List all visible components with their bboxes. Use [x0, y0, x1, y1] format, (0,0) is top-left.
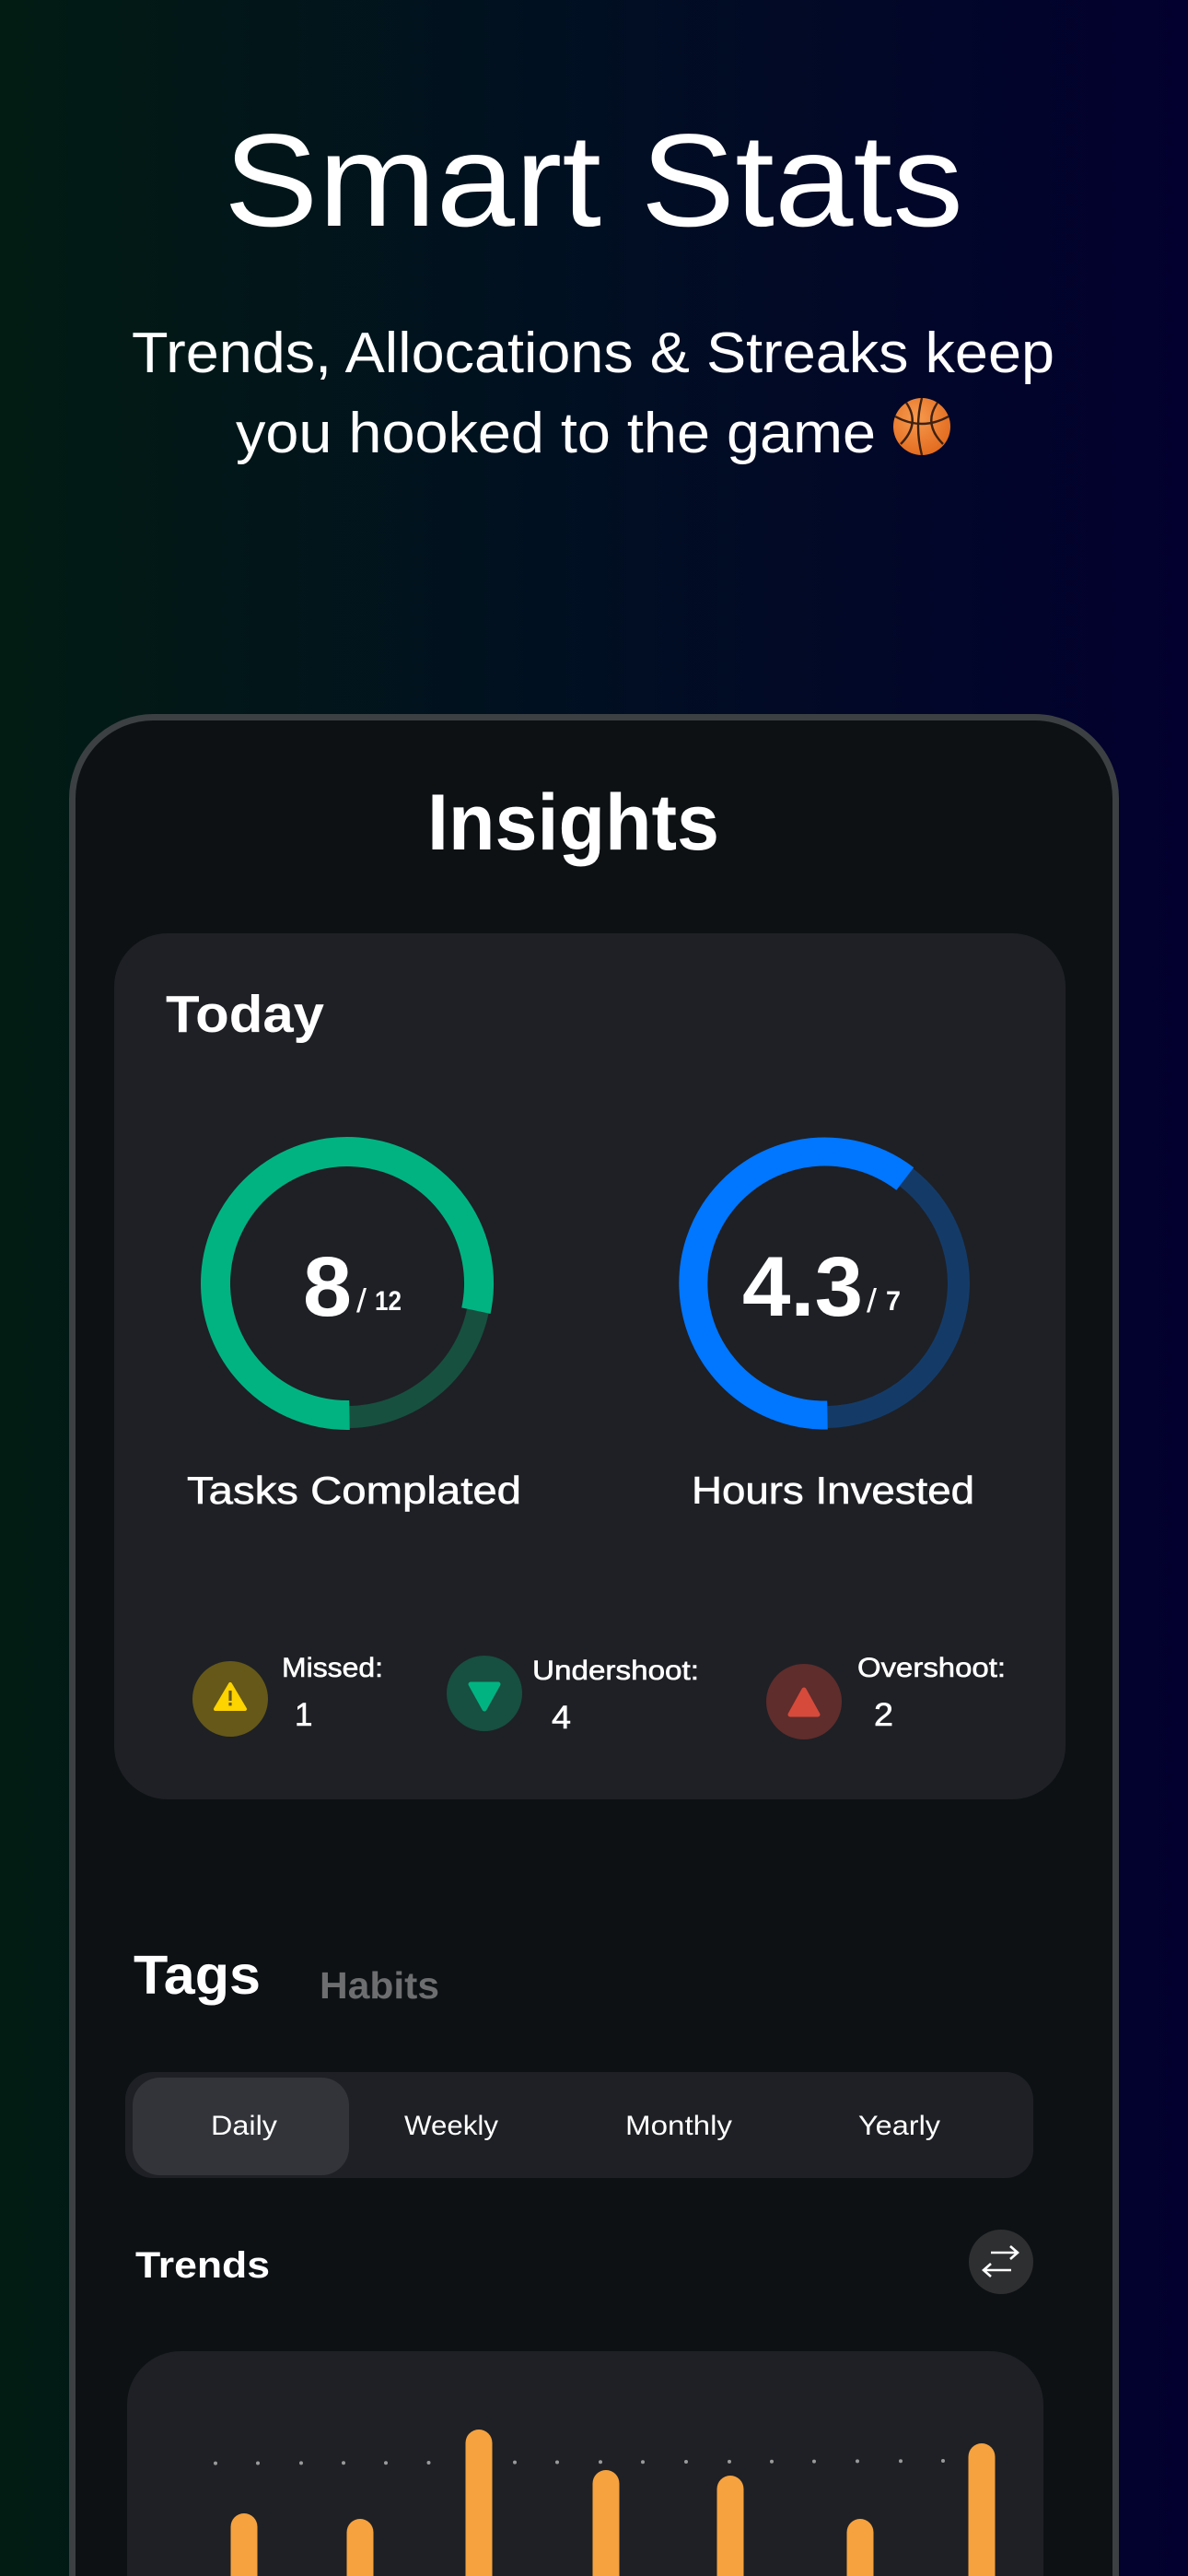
hours value: 7	[886, 1286, 901, 1317]
tasks value: 8	[303, 1240, 352, 1334]
selector track	[125, 2072, 1033, 2178]
donut chart: hours invested	[693, 1152, 959, 1417]
period selector	[125, 2072, 1033, 2178]
today card background	[114, 933, 1066, 1799]
tasks value: 12	[375, 1286, 402, 1317]
subtitle: Trends, Allocations & Streaks keep	[132, 322, 1054, 385]
panel: trends chart	[127, 2351, 1043, 2576]
chart card	[127, 2351, 1043, 2576]
bars	[230, 2430, 995, 2576]
today heading: Today	[166, 985, 324, 1044]
missed value: 1	[295, 1697, 312, 1733]
phone frame	[72, 717, 1116, 2576]
phone mockup	[72, 717, 1116, 2576]
title: Smart Stats	[224, 108, 963, 254]
selector labels	[211, 2111, 940, 2141]
subtitle	[132, 322, 1054, 465]
target dotted line	[214, 2459, 945, 2465]
undershoot label: Undershoot:	[532, 1656, 699, 1686]
selector labels: Yearly	[858, 2111, 940, 2141]
selector labels: Daily	[211, 2111, 277, 2141]
hours label: Hours Invested	[692, 1469, 974, 1512]
missed label: Missed:	[282, 1653, 383, 1683]
icon: swap button	[969, 2230, 1033, 2294]
selector labels: Weekly	[404, 2111, 498, 2141]
undershoot value: 4	[552, 1700, 571, 1736]
stat: undershoot	[447, 1656, 699, 1736]
selector labels: Monthly	[625, 2111, 732, 2141]
panel: today	[114, 933, 1066, 1799]
donut chart: tasks completed	[215, 1152, 479, 1417]
screen heading: Insights: Insights	[427, 779, 719, 867]
icon: down triangle	[447, 1656, 522, 1731]
subtitle: you hooked to the game	[236, 402, 876, 465]
icon: warning	[192, 1661, 268, 1737]
trends heading: Trends	[135, 2245, 270, 2286]
tab: tags: Tags	[134, 1945, 261, 2006]
overshoot label: Overshoot:	[857, 1653, 1006, 1683]
overshoot value: 2	[874, 1697, 893, 1733]
selected segment	[133, 2078, 349, 2175]
icon: up triangle	[766, 1664, 842, 1739]
hours value: /	[867, 1282, 877, 1319]
tasks value	[303, 1240, 402, 1334]
stat: overshoot	[766, 1653, 1006, 1739]
stat: missed	[192, 1653, 383, 1737]
tab: habits: Habits	[320, 1964, 439, 2007]
icon: basketball	[893, 398, 950, 455]
hours value: 4.3	[742, 1240, 863, 1334]
tasks label: Tasks Complated	[187, 1469, 521, 1512]
tasks value: /	[356, 1282, 367, 1319]
